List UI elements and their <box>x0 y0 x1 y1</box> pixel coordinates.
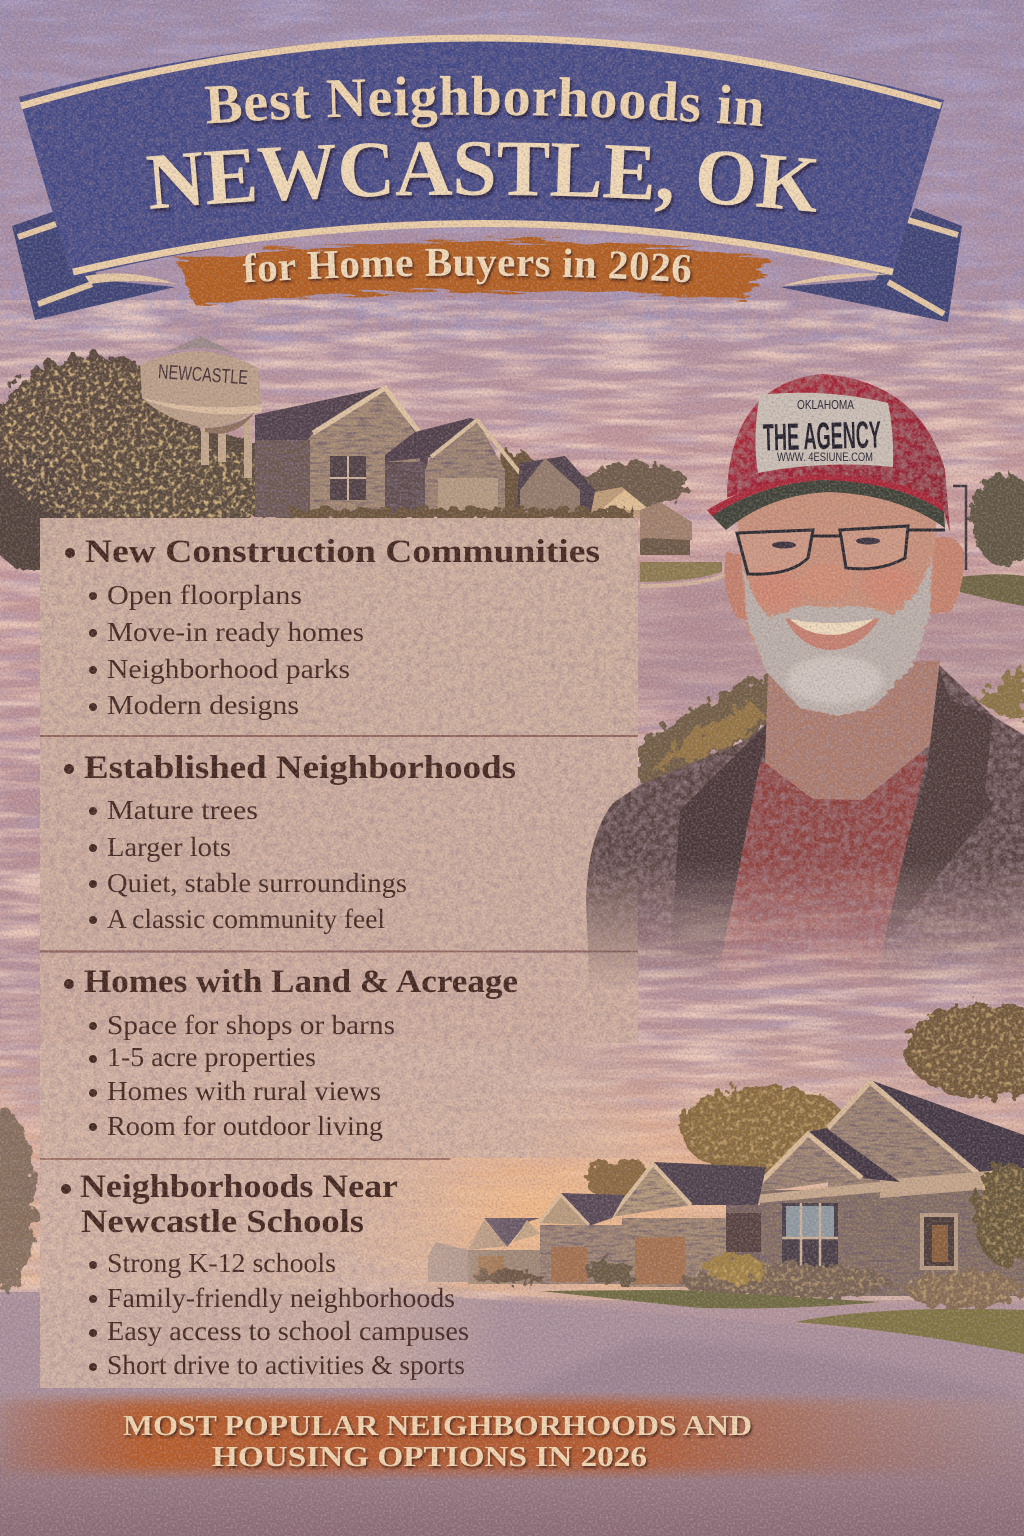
panel: new construction communities <box>40 518 638 735</box>
hat badge text: OKLAHOMA <box>797 398 855 412</box>
bushes beside portrait <box>640 665 1024 785</box>
list <box>89 580 364 720</box>
list: Strong K-12 schools <box>107 1248 336 1278</box>
panel: homes with land and acreage <box>40 952 638 1158</box>
list: Room for outdoor living <box>107 1111 383 1141</box>
right ear <box>930 537 964 614</box>
left ribbon tail <box>12 211 175 320</box>
lamp post <box>953 486 966 570</box>
hat brim lip <box>707 474 944 516</box>
heading <box>64 979 74 989</box>
list: Homes with rural views <box>107 1076 381 1106</box>
lips and smile <box>785 618 880 650</box>
orange brush stroke <box>178 241 770 305</box>
front gable roof <box>808 1128 900 1182</box>
list: Move-in ready homes <box>107 617 364 647</box>
right lapel <box>883 668 993 946</box>
agent hat: THE AGENCY <box>762 414 881 459</box>
banner lower cream stripe <box>73 224 893 272</box>
right ribbon tail <box>780 208 962 322</box>
list: Modern designs <box>107 690 299 720</box>
panel: neighborhoods near newcastle schools <box>40 1159 640 1388</box>
hat badge <box>755 393 893 473</box>
shrub strip <box>290 508 635 522</box>
list <box>89 1010 395 1141</box>
subtitle: for Home Buyers in 2026 <box>242 248 694 288</box>
left edge tree low <box>0 1110 35 1290</box>
second house <box>653 1162 766 1205</box>
list: Open floorplans <box>107 580 302 610</box>
tower tank <box>140 351 262 428</box>
beard highlights <box>787 656 883 704</box>
right foreground tree <box>974 1163 1024 1267</box>
list: Family-friendly neighborhoods <box>107 1283 455 1313</box>
banner top cream stripe <box>21 38 941 106</box>
list <box>89 1248 469 1380</box>
list: Mature trees <box>107 795 258 825</box>
scene: neighbourhood behind portrait <box>580 463 1024 785</box>
list: Space for shops or barns <box>107 1010 395 1040</box>
left lapel <box>670 724 766 960</box>
stone walls <box>540 1082 1024 1296</box>
tree between houses <box>491 450 539 510</box>
distant trees <box>580 463 690 507</box>
water tower <box>140 336 262 478</box>
banner main body <box>19 36 944 278</box>
main house roof <box>828 1080 1024 1177</box>
agent hat: WWW. 4ESIUNE.COM <box>777 450 873 464</box>
large house row at bottom <box>428 1002 1024 1354</box>
heading <box>64 764 74 774</box>
left lawn and kerb <box>640 562 722 582</box>
right tree <box>971 474 1024 566</box>
jacket <box>586 664 1024 1000</box>
fourth house <box>484 1218 540 1247</box>
panel: established neighborhoods <box>40 736 638 950</box>
tee shirt <box>715 755 927 990</box>
right lawn <box>958 574 1024 606</box>
panel: neighborhoods near newcastle schools: Newcastle Schools <box>81 1204 364 1240</box>
list <box>89 795 407 934</box>
glasses <box>737 526 945 574</box>
lawns <box>540 1290 880 1308</box>
footer caption <box>123 1410 752 1473</box>
panel: homes with land and acreage: Homes with Land & Acreage <box>84 964 518 1000</box>
list: Quiet, stable surroundings <box>107 868 407 898</box>
hat brim underside <box>712 480 945 530</box>
houses row at top <box>255 388 692 555</box>
panel: neighborhoods near newcastle schools: Neighborhoods Near <box>80 1169 398 1205</box>
list: A classic community feel <box>107 904 385 934</box>
list: Easy access to school campuses <box>107 1316 469 1346</box>
bay window <box>782 1203 838 1270</box>
background tree <box>585 1085 850 1200</box>
top tree left of water tower <box>0 355 380 570</box>
beard <box>742 555 932 716</box>
title line two: NEWCASTLE, OK <box>146 142 820 216</box>
cheeks <box>754 577 796 603</box>
heading <box>61 1184 71 1194</box>
porch recess <box>726 1213 761 1252</box>
heading <box>65 548 75 558</box>
front door <box>922 1215 956 1268</box>
list: Neighborhood parks <box>107 654 350 684</box>
shrubs <box>475 1254 1023 1310</box>
footer caption: HOUSING OPTIONS IN 2026 <box>212 1441 647 1473</box>
list: Larger lots <box>107 832 231 862</box>
tower name: NEWCASTLE <box>157 361 249 389</box>
portrait of agent <box>586 489 1024 1000</box>
neck <box>765 660 940 800</box>
hat crown <box>727 374 950 532</box>
eyes <box>772 542 796 548</box>
list: Short drive to activities & sports <box>107 1350 465 1380</box>
panel: new construction communities: New Construction Communities <box>85 534 600 570</box>
tower legs <box>205 420 248 478</box>
nose <box>799 564 853 600</box>
face <box>736 489 937 716</box>
title banner ribbon <box>12 34 962 322</box>
left ear <box>724 552 748 620</box>
footer caption: MOST POPULAR NEIGHBORHOODS AND <box>123 1410 752 1442</box>
top right tree <box>905 1002 1024 1098</box>
list: 1-5 acre properties <box>107 1042 316 1072</box>
footer orange band <box>0 1400 1024 1472</box>
panel: established neighborhoods: Established Neighborhoods <box>84 750 516 786</box>
title line one: Best Neighborhoods in <box>204 76 766 132</box>
far house <box>428 1242 468 1282</box>
agent hat <box>707 374 950 532</box>
third house <box>561 1193 625 1226</box>
